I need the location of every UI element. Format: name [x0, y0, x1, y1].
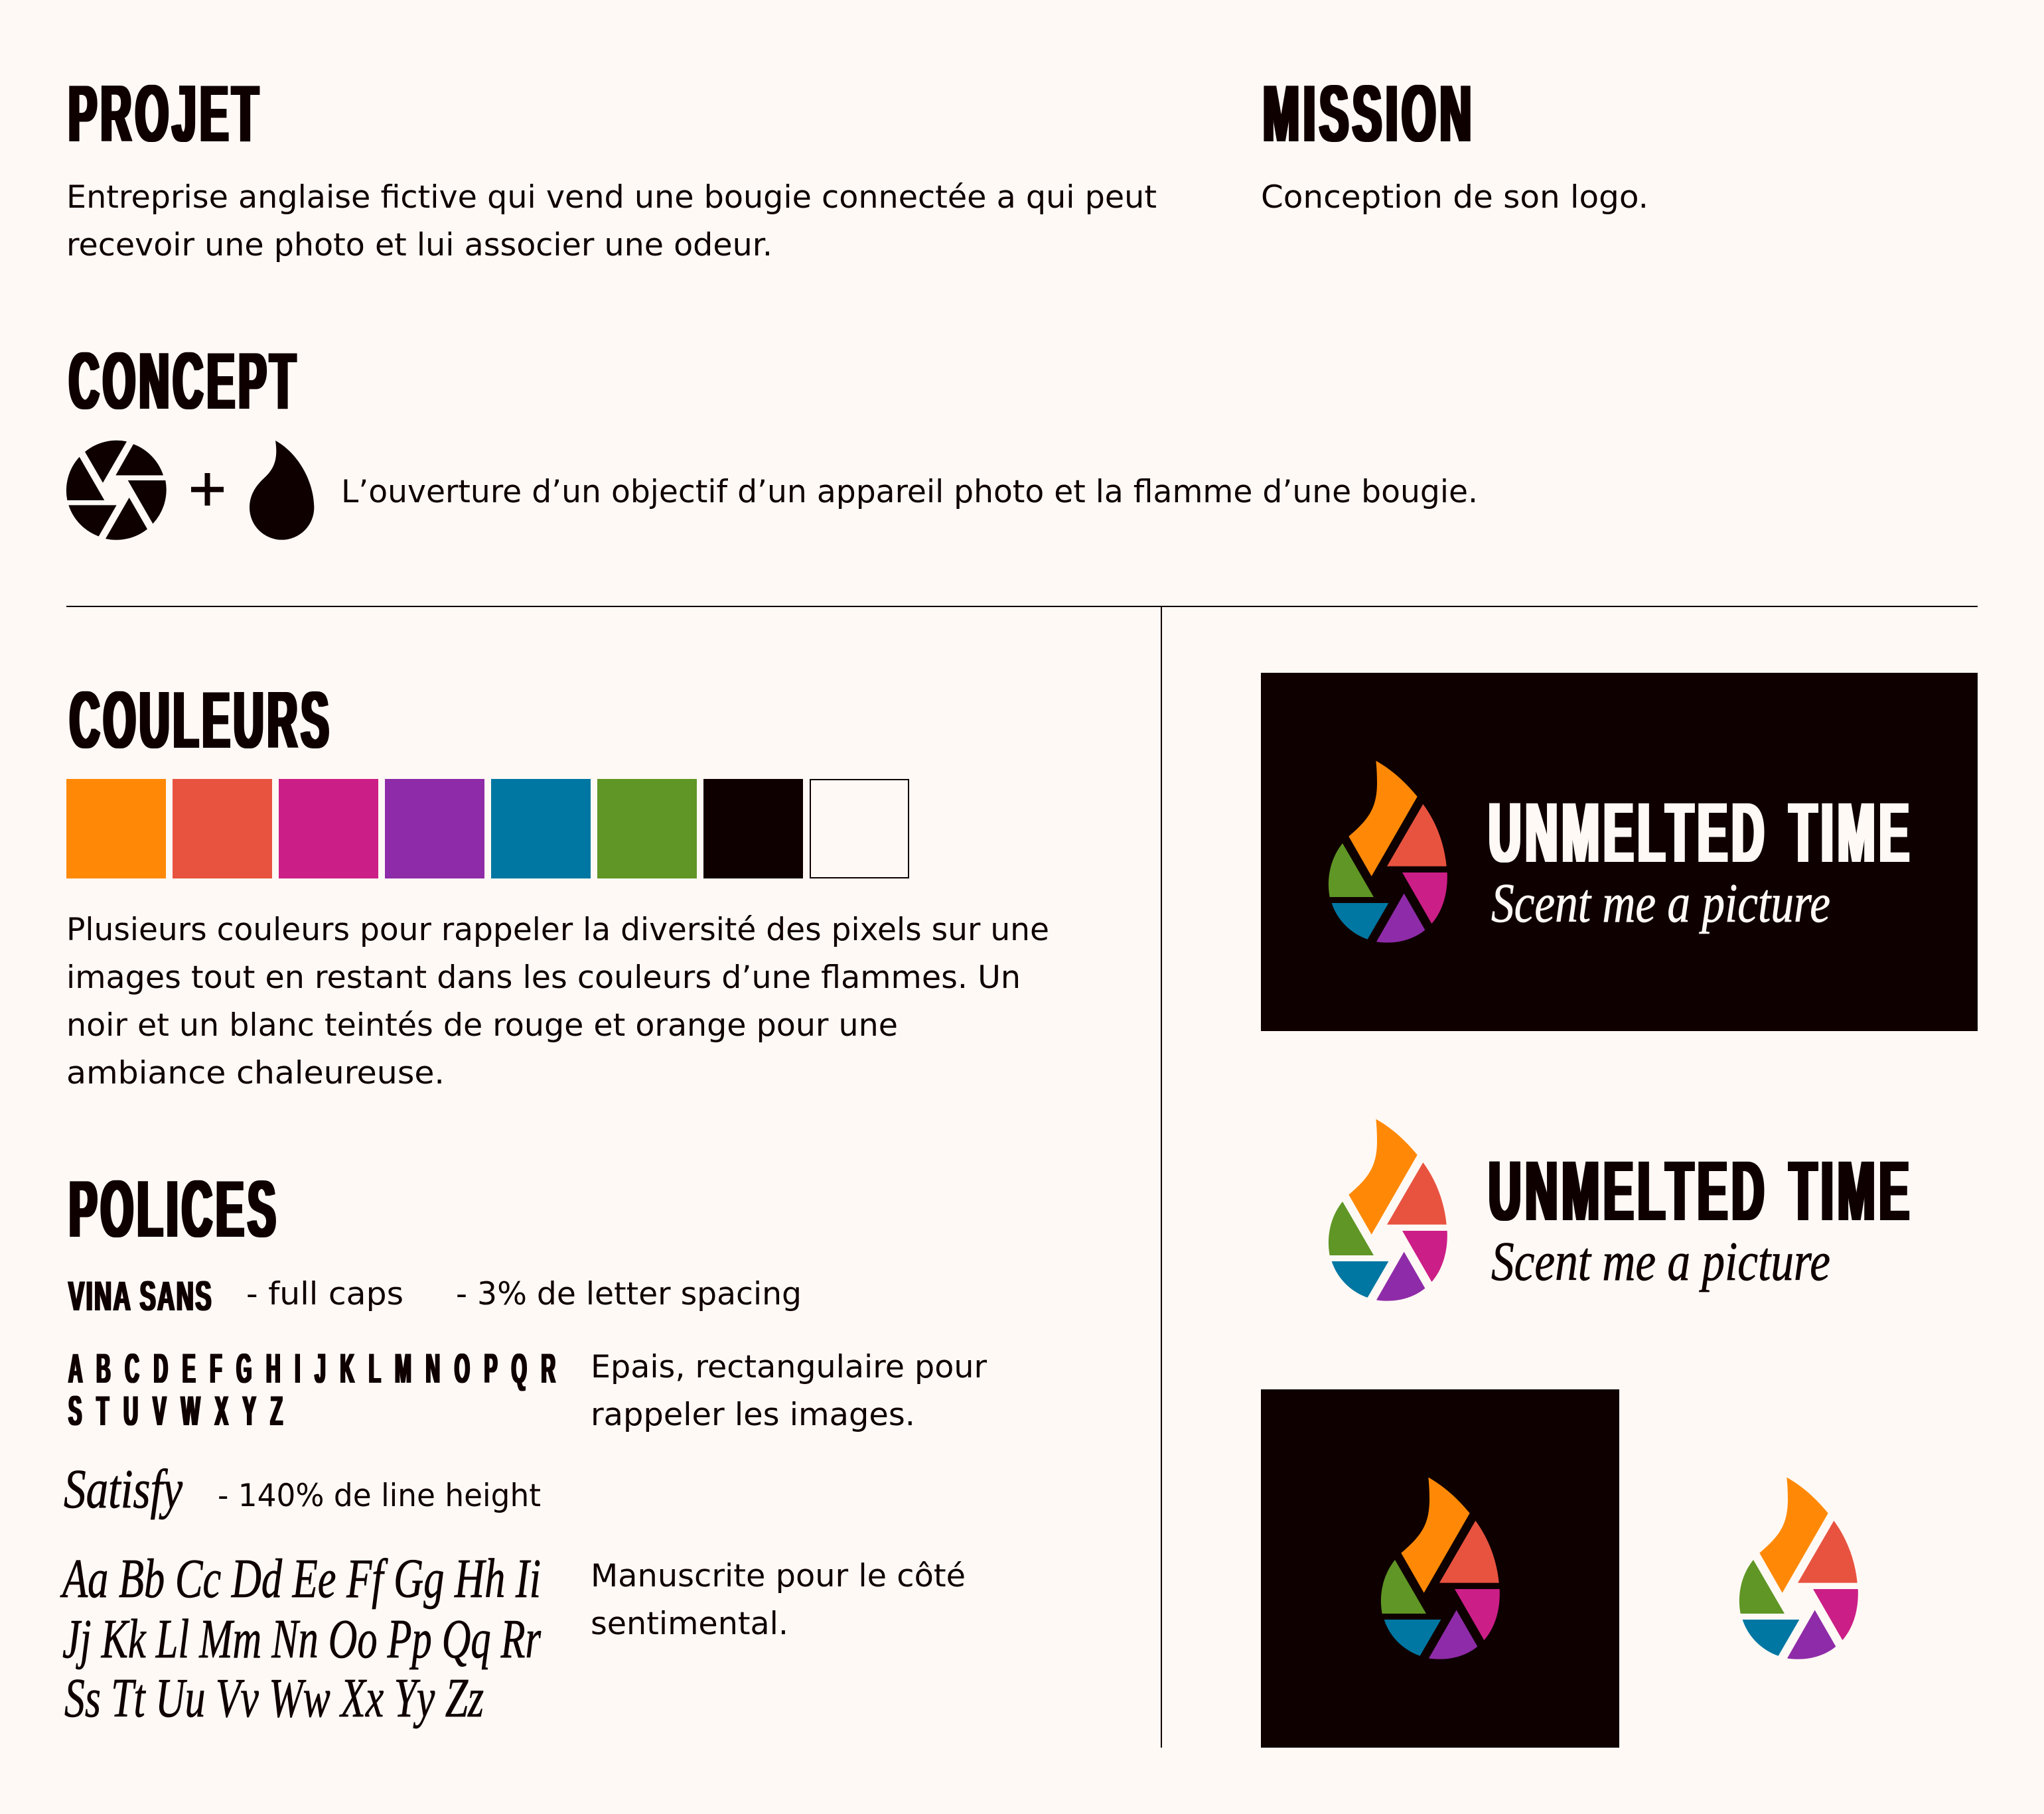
- panel: square logo on dark: [1261, 1389, 1619, 1748]
- text block: satisfy rationale: sentimental.: [591, 1606, 788, 1642]
- satisfy alphabet: Jj Kk Ll Mm Nn Oo Pp Qq Rr: [62, 1608, 541, 1670]
- font sample: vina sans: VINA SANS: [68, 1273, 213, 1320]
- tagline on light: Scent me a picture: [1491, 1231, 1830, 1292]
- tagline on dark: Scent me a picture: [1491, 872, 1830, 934]
- satisfy alphabet: Ss Tt Uu Vv Ww Xx Yy Zz: [64, 1667, 484, 1729]
- satisfy alphabet: Aa Bb Cc Dd Ee Ff Gg Hh Ii: [60, 1548, 541, 1610]
- text: A B C D E F G H I J K L M N O P Q R: [68, 1346, 555, 1392]
- text block: mission description: Conception de son logo.: [1261, 179, 1648, 216]
- text block: couleurs description: Plusieurs couleurs pour rappeler la diversité des pixels sur une: [66, 912, 1049, 948]
- panel: horizontal logo on dark: [1261, 673, 1978, 1031]
- text block: satisfy rationale: Manuscrite pour le côté: [591, 1558, 966, 1594]
- text block: projet description: recevoir une photo et lui associer une odeur.: [66, 227, 772, 263]
- text block: couleurs description: images tout en restant dans les couleurs d’une flammes. Un: [66, 959, 1021, 996]
- note: full caps: - full caps: [246, 1276, 403, 1312]
- text block: concept description: L’ouverture d’un objectif d’un appareil photo et la flamme d’une bougie.: [341, 474, 1478, 510]
- divider lines: [66, 606, 1978, 1748]
- vina sans alphabet: S T U V W X Y Z: [68, 1388, 283, 1434]
- icon: plus sign: [191, 473, 224, 506]
- icon: camera aperture: [66, 441, 167, 540]
- note: line height: - 140% de line height: [218, 1478, 541, 1514]
- logo flame in square: [1381, 1478, 1500, 1659]
- text block: satisfy rationale: [591, 1558, 966, 1642]
- panel: horizontal logo on light: [1329, 1119, 1913, 1301]
- note: letter spacing: - 3% de letter spacing: [456, 1276, 802, 1312]
- text block: vina sans rationale: Epais, rectangulaire pour: [591, 1349, 987, 1385]
- colour swatches: [66, 779, 909, 878]
- text block: couleurs description: noir et un blanc teintés de rouge et orange pour une: [66, 1007, 898, 1044]
- logo flame on light: [1329, 1119, 1447, 1301]
- text block: projet description: Entreprise anglaise fictive qui vend une bougie connectée a qui peut: [66, 179, 1157, 216]
- font sample: satisfy: Satisfy: [64, 1458, 183, 1520]
- text block: vina sans rationale: rappeler les images.: [591, 1397, 915, 1433]
- logo flame on light background: [1739, 1478, 1858, 1659]
- text block: vina sans rationale: [591, 1349, 987, 1433]
- heading: projet: PROJET: [68, 68, 262, 159]
- text block: couleurs description: ambiance chaleureuse.: [66, 1055, 445, 1091]
- icon: candle flame: [250, 441, 314, 540]
- text block: couleurs description: [66, 912, 1049, 1091]
- vina sans alphabet: [68, 1346, 555, 1434]
- heading: concept: CONCEPT: [69, 336, 299, 426]
- heading: polices: POLICES: [69, 1164, 279, 1254]
- heading: couleurs: COULEURS: [70, 675, 332, 765]
- satisfy alphabet: [60, 1548, 541, 1729]
- logo flame on dark: [1329, 761, 1447, 943]
- heading: mission: MISSION: [1263, 68, 1475, 159]
- text block: projet description: [66, 179, 1157, 263]
